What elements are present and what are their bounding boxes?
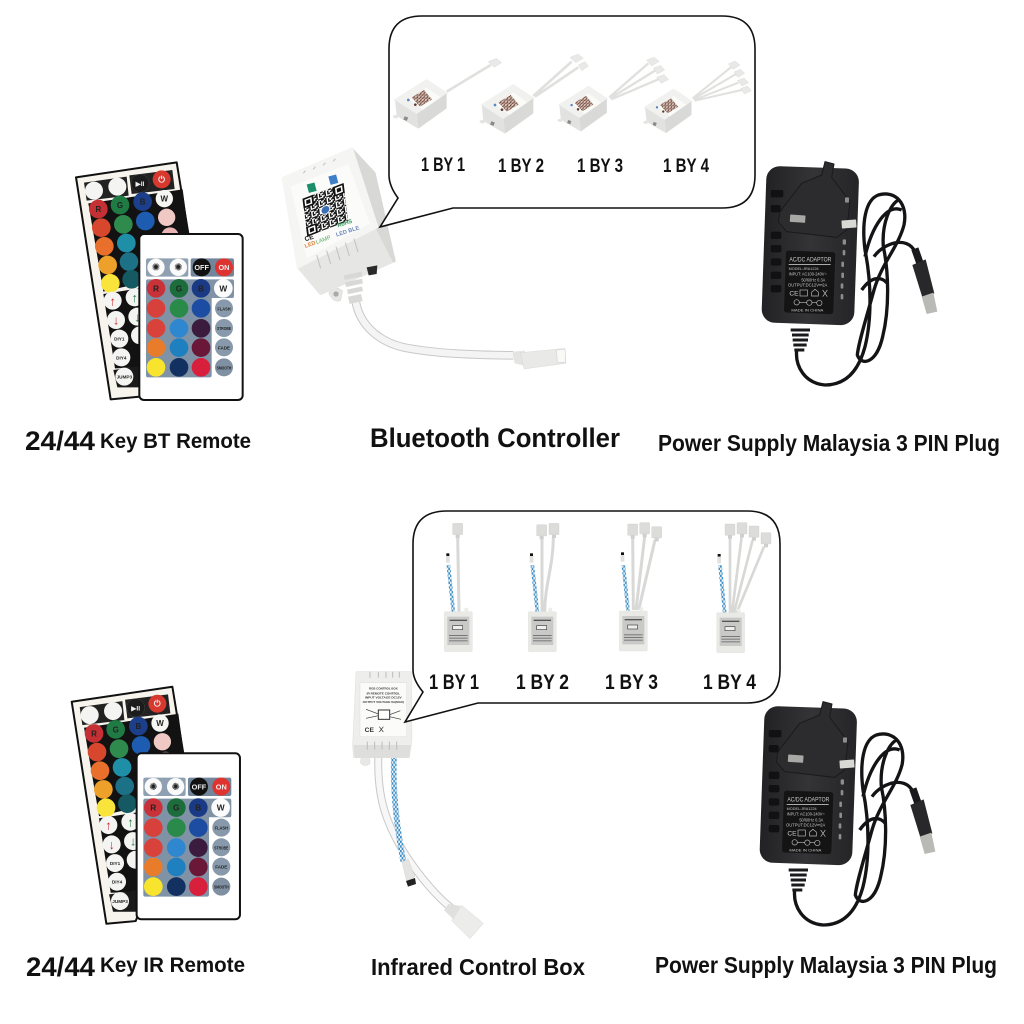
44-key remote, top row: ↓ [113,314,119,328]
24-key remote, top row: ✺ [152,263,160,274]
24-key remote, top row: G [176,283,182,293]
24-key remote, bottom row: G [173,803,180,813]
44-key remote, top row: R [95,205,101,214]
Bluetooth controller with cable: CE [304,234,315,243]
Bluetooth controller with cable: RoHS [337,219,353,229]
24-key remote, bottom row: ✺ [149,782,157,793]
power adapter, top row [761,162,937,385]
24-key remote, top row: ✺ [174,263,183,274]
44-key remote, top row: ↑ [110,294,116,308]
24-key remote, top row: FLASH [217,306,231,312]
infrared control box with cables: CE [365,727,374,734]
label: 24/44 Key BT Remote [25,426,251,456]
44-key remote, top row: DIY4 [116,355,127,360]
speech bubble: Bluetooth variants: 1 BY 4 [663,156,709,177]
label: Bluetooth Controller: Bluetooth Controller [370,423,620,453]
1 BY 1 IR controller [444,523,472,652]
24-key remote, top row [139,234,243,400]
44-key remote, bottom row: ↑ [127,815,134,829]
24-key remote, top row: W [219,283,227,293]
speech bubble: infrared variants: 1 BY 2 [516,671,569,694]
power adapter, top row: 50/60Hz 0.3A [801,277,825,282]
label: 24/44 Key BT Remote: 24/44 [25,426,95,456]
infrared control box with cables [353,672,483,939]
24-key remote, top row: STROBE [217,326,231,332]
24-key remote, top row: B [198,283,204,293]
44-key remote, top row: W [161,195,169,204]
44-key remote, top row: ⏻ [158,174,166,184]
44-key remote, top row: B [140,198,146,207]
speech bubble: Bluetooth variants: 1 BY 2 [498,156,544,177]
1 BY 4 IR controller [717,523,771,653]
44-key remote, top row: JUMP3 [117,375,133,380]
44-key remote, bottom row: B [135,722,141,731]
24-key remote, bottom row: ✺ [171,782,180,793]
24-key remote, bottom row: STROBE [214,845,229,851]
44-key remote, bottom row: DIY1 [110,861,121,866]
Bluetooth controller with cable: LED BLE [335,225,361,239]
Bluetooth controller with cable: LED [304,240,317,250]
24-key remote, top row: OFF [194,263,210,272]
power adapter, top row: MODEL:JRA1224 [789,266,819,271]
power adapter, top row: CE [789,290,799,297]
44-key remote, top row: G [117,201,123,210]
speech bubble: Bluetooth variants [380,16,755,227]
label: 24/44 Key IR Remote: 24/44 [26,952,95,982]
1 BY 3 controller [557,57,669,131]
44-key remote, bottom row: ▶II [130,705,140,712]
label: Power Supply Malaysia 3 PIN Plug, bottom: Power Supply Malaysia 3 PIN Plug [655,952,997,978]
24-key remote, bottom row: B [195,803,201,813]
44-key remote, bottom row: ↓ [130,835,136,849]
speech bubble: infrared variants: 1 BY 1 [429,671,479,694]
24-key remote, bottom row: SMOOTH [214,885,229,891]
speech bubble: Bluetooth variants: 1 BY 1 [421,155,465,176]
24-key remote, bottom row [137,753,240,919]
44-key remote, bottom row: W [156,719,164,728]
24-key remote, bottom row: ON [216,782,227,791]
44-key remote, bottom row: ⏻ [154,699,162,709]
1 BY 2 controller [479,54,588,134]
44-key remote, top row: ↑ [132,291,138,305]
44-key remote, top row [76,162,193,399]
Bluetooth controller with cable [283,149,566,369]
infrared control box with cables: RGB CONTROL BOX [369,686,398,690]
44-key remote, top row: ↓ [134,310,140,324]
24-key remote, top row: FADE [218,345,231,351]
label: 24/44 Key IR Remote: Key IR Remote [100,954,245,977]
power adapter, bottom row: MADE IN CHINA [789,847,822,852]
44-key remote, top row: DIY1 [114,337,125,342]
power adapter, bottom row: AC/DC ADAPTOR [787,796,830,803]
power adapter, bottom row: CE [787,830,797,837]
1 BY 4 controller [643,61,751,133]
1 BY 3 IR controller [619,523,662,651]
44-key remote, bottom row: ↑ [105,819,112,833]
power adapter, bottom row: MODEL:JRA1224 [787,806,817,811]
label: Infrared Control Box: Infrared Control Box [371,954,585,980]
24-key remote, top row: SMOOTH [217,365,232,371]
label: 24/44 Key BT Remote: Key BT Remote [100,430,251,453]
1 BY 2 IR controller [528,523,559,652]
24-key remote, top row: R [153,283,159,293]
44-key remote, bottom row: ↓ [109,838,115,852]
24-key remote, top row: ON [218,263,229,272]
44-key remote, top row: ▶II [135,181,145,188]
label: 24/44 Key IR Remote [26,952,245,982]
speech bubble: infrared variants: 1 BY 3 [605,671,658,694]
power adapter, bottom row [759,702,935,925]
power adapter, top row: MADE IN CHINA [791,307,824,312]
power adapter, bottom row: OUTPUT:DC12V⎓2A [786,823,825,828]
power adapter, top row: INPUT: AC100-240V~ [789,272,827,277]
44-key remote, bottom row: DIY4 [112,880,123,885]
24-key remote, bottom row: W [217,803,225,813]
power adapter, bottom row: 50/60Hz 0.3A [799,817,823,822]
infrared control box with cables: OUTPUT VOLTAGE 6A(MAX) [363,700,404,704]
24-key remote, bottom row: FLASH [215,826,228,832]
44-key remote, bottom row: R [91,729,97,738]
label: Power Supply Malaysia 3 PIN Plug, top: Power Supply Malaysia 3 PIN Plug [658,430,1000,456]
power adapter, top row: OUTPUT:DC12V⎓2A [788,283,827,288]
power adapter, top row: AC/DC ADAPTOR [789,256,832,263]
44-key remote, bottom row: JUMP3 [112,899,128,904]
44-key remote, bottom row: G [113,725,119,734]
24-key remote, bottom row: FADE [215,865,228,871]
speech bubble: infrared variants: 1 BY 4 [703,671,756,694]
power adapter, bottom row: INPUT: AC100-240V~ [787,812,825,817]
infrared control box with cables: IR REMOTE CONTROL [367,691,400,695]
speech bubble: infrared variants [405,511,780,722]
1 BY 1 controller [393,58,502,129]
44-key remote, bottom row [72,687,188,924]
24-key remote, bottom row: R [150,803,156,813]
infrared control box with cables: INPUT VOLTAGE DC12V [365,696,402,700]
24-key remote, bottom row: OFF [192,782,207,791]
speech bubble: Bluetooth variants: 1 BY 3 [577,156,623,177]
Bluetooth controller with cable: LAMP [315,235,332,246]
